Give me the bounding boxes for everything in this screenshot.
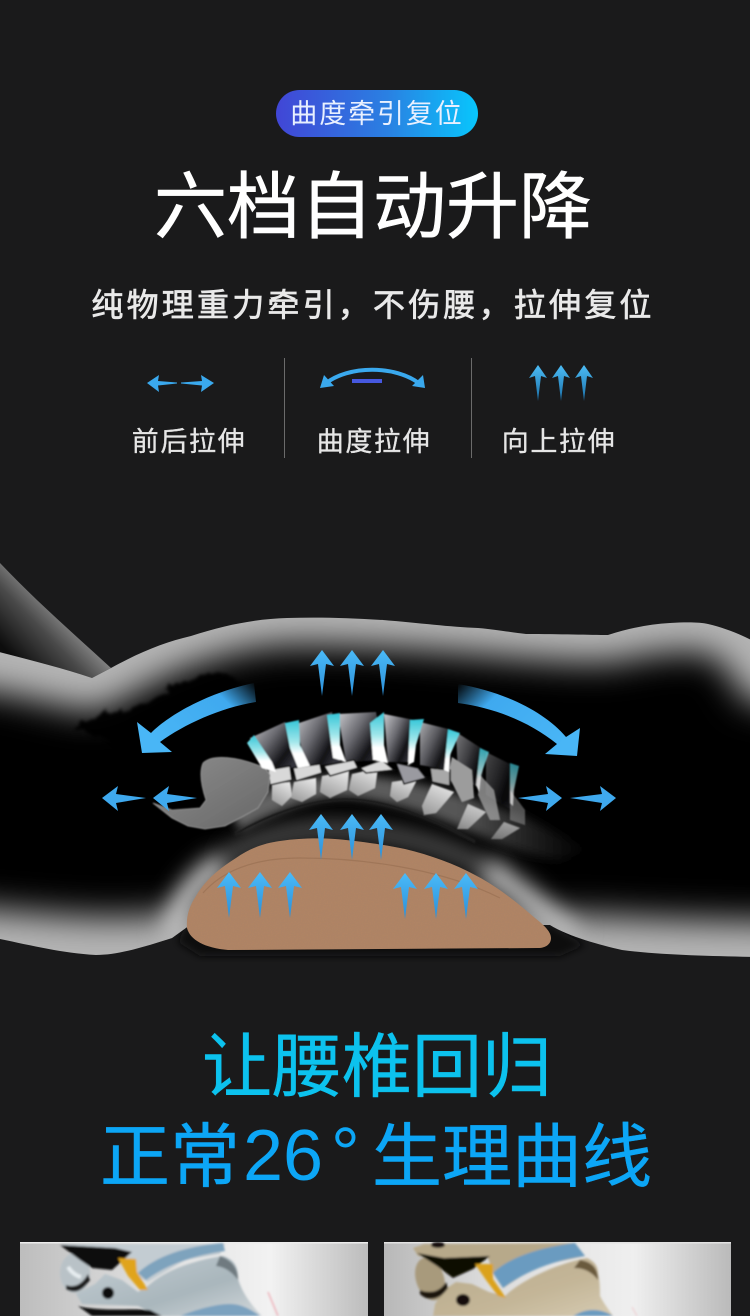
photo: right vertebra (384, 1242, 731, 1316)
body silhouette (0, 600, 750, 970)
left outward arrows (102, 786, 197, 811)
headline line 2 (100, 1114, 652, 1196)
curved arrow left (137, 683, 256, 753)
right outward arrows (518, 786, 616, 811)
lower bone (433, 1258, 613, 1316)
bright glow right of the pillow (485, 870, 575, 940)
illustration: body with spine and pillow (0, 563, 750, 958)
facet (410, 1254, 450, 1304)
dark cavities (417, 1253, 490, 1278)
icon: front-back stretch arrows (147, 375, 214, 392)
curved arrow right (458, 684, 580, 756)
divider (284, 358, 285, 458)
icon: curvature stretch arrow (320, 368, 425, 388)
arch band under vertebrae (230, 775, 590, 860)
label: 向上拉伸: 向上拉伸 (502, 427, 616, 457)
headline line 2: 生理曲线 (372, 1118, 652, 1196)
nerve (118, 1258, 148, 1290)
badge: 曲度牵引复位: 曲度牵引复位 (290, 99, 464, 129)
divider (471, 358, 472, 458)
title: 六档自动升降 (154, 167, 592, 248)
dim glow over the pillow (225, 830, 500, 878)
subtitle: 纯物理重力牵引，不伤腰，拉伸复位 (91, 287, 655, 323)
pillow (187, 838, 551, 950)
sacrum (153, 757, 270, 829)
right upward arrows on pillow (393, 873, 478, 919)
spine (153, 712, 590, 860)
lower processes (448, 757, 525, 825)
headline line 1: 让腰椎回归 (202, 1028, 552, 1106)
pain line (632, 1307, 637, 1316)
left upward arrows on pillow (217, 872, 302, 918)
pain line (268, 1292, 278, 1316)
spinous processes with teal tips (247, 712, 519, 806)
nerve (475, 1264, 506, 1298)
headline line 2: 26 (243, 1116, 323, 1196)
rough shadow blot on the waist (76, 672, 234, 735)
dark cavities (60, 1245, 132, 1270)
top upward arrows (310, 650, 395, 696)
bright glow left of the pillow (172, 862, 225, 940)
upper bone (413, 1243, 585, 1288)
middle upward arrows (309, 814, 393, 860)
badge: 曲度牵引复位 (276, 90, 478, 137)
upper bone (60, 1244, 225, 1282)
photo: left vertebra (20, 1242, 368, 1316)
raised leg (0, 563, 111, 678)
stretch modes row (132, 358, 616, 458)
facet (60, 1253, 90, 1293)
headline line 2: ° (331, 1114, 360, 1194)
headline line 2: 正常 (100, 1118, 240, 1196)
icon: upward stretch arrows (529, 365, 593, 401)
discs (138, 1243, 225, 1280)
discs (493, 1243, 585, 1288)
shadow under pillow (178, 925, 585, 956)
lower bone (76, 1256, 262, 1316)
label: 前后拉伸: 前后拉伸 (132, 427, 246, 457)
vertebral bodies (272, 768, 520, 839)
facet row (268, 760, 450, 786)
label: 曲度拉伸: 曲度拉伸 (317, 427, 431, 457)
webs between spinous processes (250, 712, 514, 810)
